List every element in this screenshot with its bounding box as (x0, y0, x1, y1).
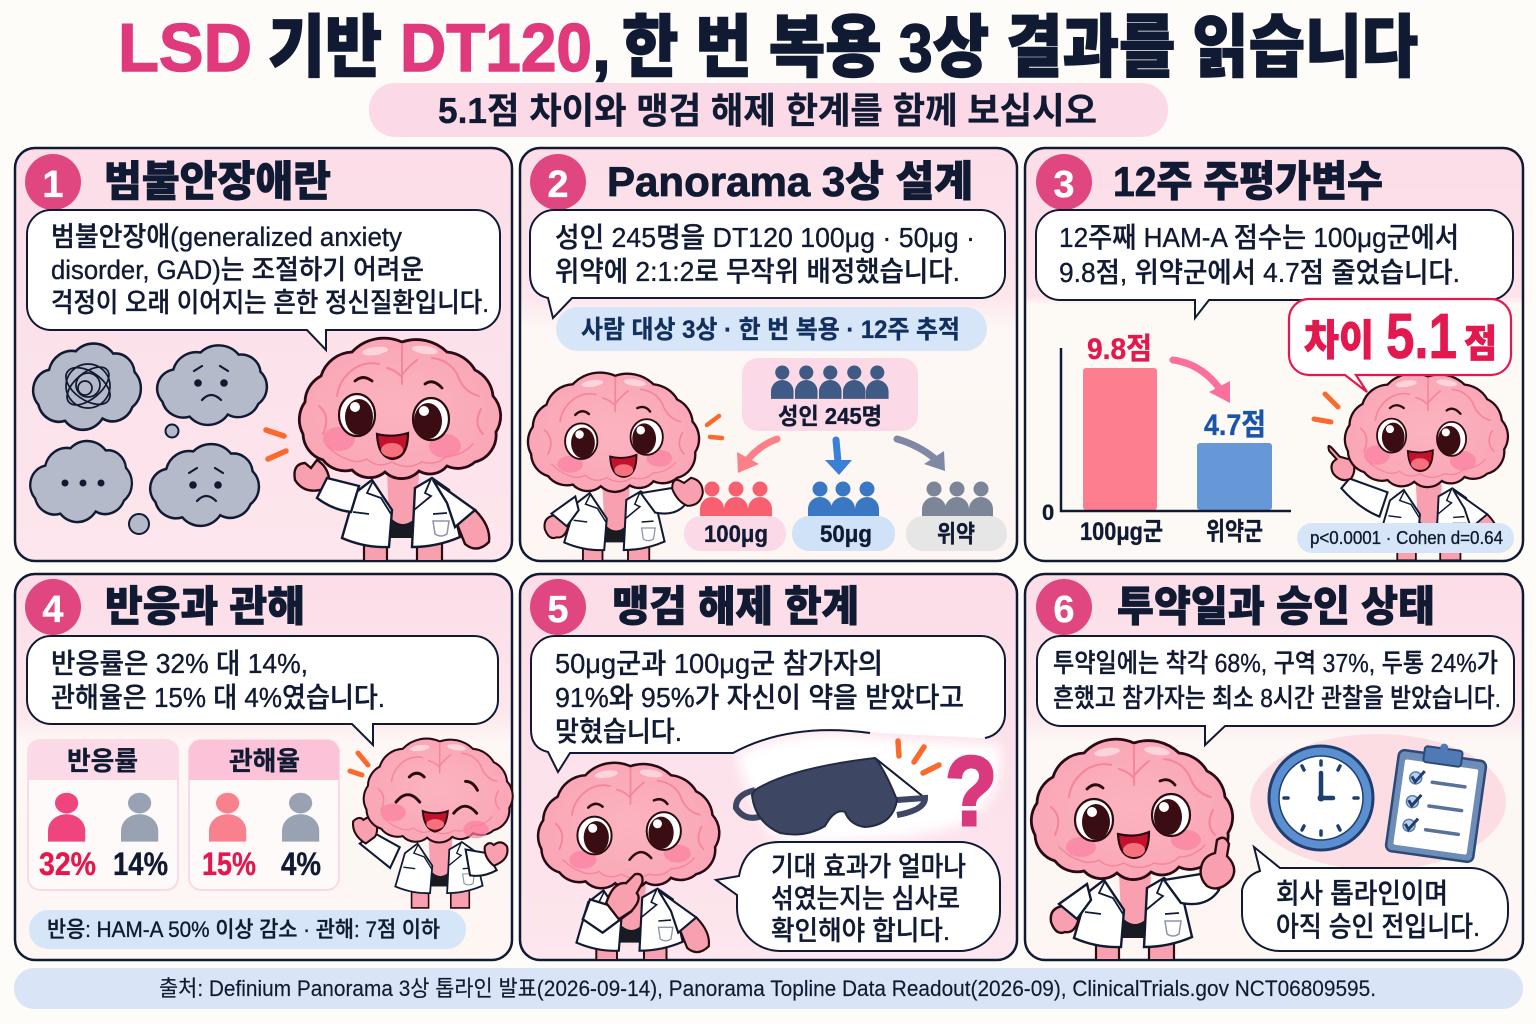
heading 2: Panorama 3상 설계 (607, 158, 973, 205)
arrows to arms (737, 439, 945, 475)
design tag pill (556, 307, 987, 351)
white glow behind mask (736, 734, 1000, 842)
title: 한 번 복용 3상 결과를 읽습니다 (622, 10, 1418, 86)
speech bubble 2: 위약에 2:1:2로 무작위 배정했습니다. (555, 256, 960, 287)
callout: difference 5.1: 5.1 (1386, 300, 1457, 372)
panel 5: 맹검 해제 한계 (520, 574, 1017, 969)
number badge 2 (530, 154, 586, 210)
brain mascot 6 (1031, 739, 1234, 967)
speech bubble 5b: 기대 효과가 얼마나 (771, 852, 966, 882)
title: , (592, 10, 611, 86)
number badge 6 (1036, 579, 1092, 635)
footer source bar (14, 968, 1523, 1009)
bar chart: 9.8점 (1087, 333, 1152, 366)
card: remission rate: 관해율 (229, 746, 300, 776)
arm: 50μg (792, 482, 895, 551)
arm: 100μg: 100μg (704, 521, 768, 548)
number badge 5 (530, 579, 586, 635)
speech bubble 3: 9.8점, 위약군에서 4.7점 줄었습니다. (1059, 257, 1460, 288)
subtitle pill: 5.1점 차이와 맹검 해제 한계를 함께 보십시오 (438, 90, 1097, 131)
panel 1: 범불안장애란 (15, 148, 512, 567)
heading 5: 맹검 해제 한계 (612, 583, 859, 630)
speech bubble 1: 걱정이 오래 이어지는 흔한 정신질환입니다. (51, 288, 489, 318)
design tag pill: 사람 대상 3상 · 한 번 복용 · 12주 추적 (581, 316, 960, 344)
brain mascot 3 (1328, 373, 1508, 560)
speech bubble 4 (27, 636, 498, 745)
arm: placebo: 위약 (937, 521, 975, 548)
footer source bar: 출처: Definium Panorama 3상 톱라인 발표(2026-09-14), Panorama Topline Data Readout(2026-09), ClinicalTrials.gov NCT06809595. (159, 976, 1376, 1001)
icon: orange sparks (898, 741, 939, 773)
title: LSD (118, 10, 252, 86)
card: response rate: 32% (39, 846, 96, 882)
card: response rate (28, 740, 178, 890)
speech bubble 5: 맞혔습니다. (555, 716, 682, 747)
icon: eye mask (736, 758, 925, 834)
speech bubble 1: disorder, GAD)는 조절하기 어려운 (51, 255, 424, 285)
statistics pill (1297, 523, 1514, 553)
speech bubble 4: 관해율은 15% 대 4%였습니다. (51, 682, 385, 713)
title (118, 10, 1418, 86)
bar chart (1042, 333, 1291, 546)
speech bubble 5: 91%와 95%가 자신이 약을 받았다고 (555, 682, 964, 713)
card: remission rate (189, 740, 339, 890)
icon: orange sparks (350, 753, 368, 775)
speech bubble 2: 성인 245명을 DT120 100μg · 50μg · (555, 222, 975, 253)
speech bubble 5b (716, 842, 1000, 951)
brain mascot 5 (538, 763, 719, 969)
brain mascot 1 (294, 338, 501, 567)
heading 3: 12주 주평가변수 (1113, 158, 1383, 205)
speech bubble 3: 12주째 HAM-A 점수는 100μg군에서 (1059, 222, 1459, 253)
heading 1: 범불안장애란 (104, 158, 331, 205)
icon: worry clouds (30, 344, 267, 534)
heading 4: 반응과 관해 (105, 583, 305, 630)
statistics pill: p<0.0001 · Cohen d=0.64 (1310, 528, 1503, 548)
panel 3: 12주 주평가변수 (1025, 148, 1523, 561)
number badge 1: 1 (42, 164, 64, 206)
brain mascot 2 (528, 373, 703, 567)
speech bubble 6b: 아직 승인 전입니다. (1276, 911, 1480, 942)
card: remission rate: 15% (202, 846, 256, 882)
card: response rate: 14% (113, 846, 168, 882)
icon: clipboard (1385, 737, 1488, 863)
icon: orange sparks (1314, 394, 1338, 422)
subtitle pill (369, 83, 1168, 137)
number badge 4: 4 (42, 589, 64, 631)
speech bubble 6 (1037, 636, 1514, 745)
number badge 1 (25, 154, 81, 210)
definition pill: 반응: HAM-A 50% 이상 감소 · 관해: 7점 이하 (47, 917, 440, 942)
number badge 5: 5 (547, 589, 569, 631)
speech bubble 5 (531, 636, 1005, 772)
panel 4: 반응과 관해 (15, 574, 513, 960)
speech bubble 1: 범불안장애(generalized anxiety (51, 222, 402, 252)
card: response rate: 반응률 (67, 746, 138, 776)
definition pill (29, 910, 466, 949)
arm: 100μg (684, 482, 786, 551)
card: remission rate: 4% (281, 846, 321, 882)
arrow: bar drop (1173, 360, 1230, 403)
icon background blob (1250, 734, 1506, 870)
speech bubble 6b (1242, 847, 1508, 951)
bar chart: 4.7점 (1204, 409, 1266, 442)
callout: difference 5.1 (1289, 299, 1511, 392)
speech bubble 1 (27, 210, 500, 350)
heading 6: 투약일과 승인 상태 (1117, 583, 1435, 630)
participants box: 성인 245명 (778, 403, 882, 429)
icon: question mark: ? (945, 736, 997, 846)
speech bubble 6b: 회사 톱라인이며 (1276, 878, 1448, 909)
callout: difference 5.1: 차이 (1304, 317, 1374, 364)
icon: orange sparks (266, 430, 286, 459)
number badge 3 (1036, 154, 1092, 210)
brain mascot 4 (353, 739, 513, 908)
arm: 50μg: 50μg (820, 521, 872, 548)
number badge 3: 3 (1053, 164, 1075, 206)
title: 기반 (268, 10, 382, 86)
bar chart: 위약군 (1206, 518, 1263, 546)
icon: clock (1269, 746, 1373, 850)
speech bubble 5b: 섞였는지는 심사로 (771, 884, 960, 914)
bar chart: 0 (1042, 500, 1054, 525)
speech bubble 3 (1036, 210, 1513, 318)
speech bubble 4: 반응률은 32% 대 14%, (51, 648, 308, 679)
speech bubble 5b: 확인해야 합니다. (771, 916, 950, 946)
number badge 4 (25, 579, 81, 635)
panel 2: Panorama 3상 설계 (520, 148, 1017, 567)
arm: placebo (906, 482, 1007, 551)
participants box (742, 358, 918, 431)
number badge 6: 6 (1053, 589, 1075, 631)
bar chart: 100μg군 (1080, 518, 1163, 546)
icon: orange sparks (707, 416, 722, 438)
panel 6: 투약일과 승인 상태 (1025, 574, 1523, 967)
number badge 2: 2 (547, 164, 569, 206)
title: DT120 (400, 10, 592, 86)
callout: difference 5.1: 점 (1464, 324, 1497, 366)
speech bubble 5: 50μg군과 100μg군 참가자의 (555, 648, 883, 679)
speech bubble 2 (530, 210, 1005, 318)
